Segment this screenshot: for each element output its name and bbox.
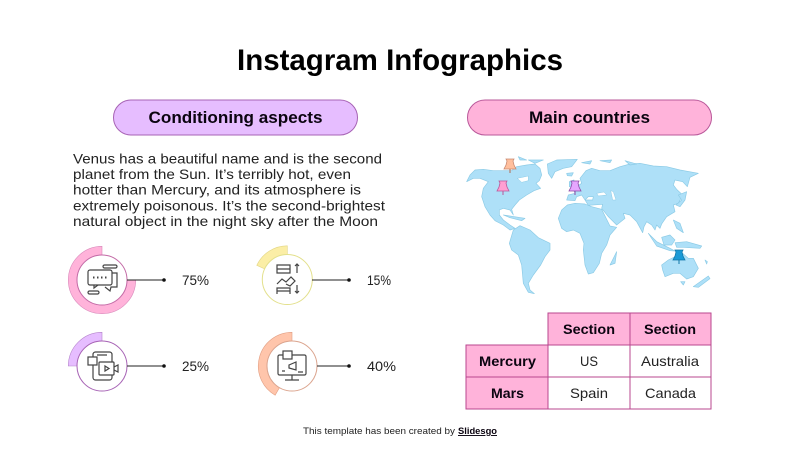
- table: [466, 313, 711, 409]
- pin: blue: [673, 250, 685, 264]
- value: 15%: [367, 272, 391, 288]
- body text: natural object in the night sky after the Moon: [73, 213, 378, 229]
- pin: purple: [569, 181, 581, 195]
- table cells: US: [580, 353, 598, 369]
- eurasia: [567, 163, 698, 233]
- heading: conditioning aspects: Conditioning aspects: [148, 108, 322, 127]
- connector: [127, 365, 164, 367]
- body text: Venus has a beautiful name and is the second: [73, 150, 382, 166]
- pin: orange: [504, 159, 516, 173]
- title: Instagram Infographics: [237, 44, 563, 77]
- body text: [73, 150, 385, 229]
- donut: 40%: [258, 332, 396, 395]
- connector: [312, 279, 349, 281]
- connector: [127, 279, 164, 281]
- table headers: [479, 321, 696, 401]
- australia: [662, 252, 698, 279]
- donut: 15%: [257, 246, 391, 304]
- icon: chart and arrows: [277, 264, 299, 294]
- table cells: Spain: [570, 385, 608, 401]
- heading: main countries: Main countries: [529, 108, 650, 127]
- greenland: [547, 159, 577, 178]
- africa: [558, 203, 617, 274]
- footer: Slidesgo: [458, 426, 497, 437]
- table cells: Canada: [645, 385, 696, 401]
- icon: phone video: [88, 352, 118, 380]
- north america: [467, 164, 542, 230]
- footer: This template has been created by: [303, 426, 455, 437]
- world map: [467, 157, 710, 294]
- heading: main countries: [468, 100, 712, 135]
- value: 75%: [182, 272, 209, 288]
- icon: monitor megaphone: [278, 351, 306, 380]
- value: 40%: [367, 358, 396, 374]
- connector: [317, 365, 349, 367]
- table headers: Section: [644, 321, 696, 337]
- heading: conditioning aspects: [114, 100, 358, 135]
- table cells: Australia: [641, 353, 699, 369]
- table headers: Section: [563, 321, 615, 337]
- icon: chat bubbles: [88, 265, 117, 294]
- inland seas: [517, 176, 616, 200]
- donut: 25%: [68, 332, 209, 391]
- body text: planet from the Sun. It’s terribly hot, even: [73, 166, 351, 182]
- pin: pink: [497, 181, 509, 195]
- south america: [509, 226, 550, 294]
- islands: [503, 157, 710, 287]
- table cells: [570, 353, 699, 401]
- body text: hotter than Mercury, and its atmosphere is: [73, 182, 361, 198]
- donut: 75%: [68, 246, 209, 314]
- value: 25%: [182, 358, 209, 374]
- body text: extremely poisonous. It’s the second-brightest: [73, 197, 385, 213]
- table headers: Mercury: [479, 353, 536, 369]
- table headers: Mars: [491, 385, 524, 401]
